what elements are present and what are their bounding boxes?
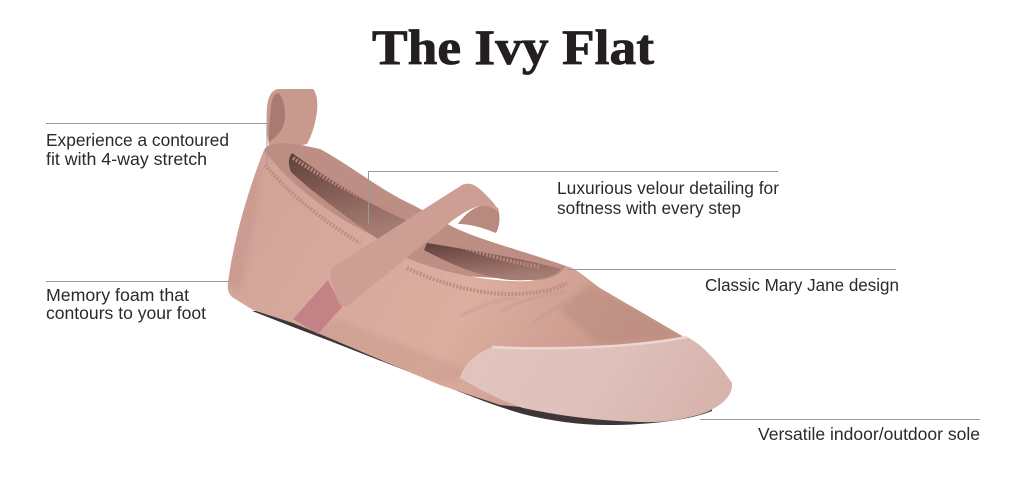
callout: contoured fit: Experience a contoured xyxy=(46,130,229,150)
callout: velour detailing: Luxurious velour detailing for xyxy=(557,178,779,198)
strap xyxy=(330,184,499,306)
gathers xyxy=(460,292,590,325)
callout: contoured fit: fit with 4-way stretch xyxy=(46,149,207,169)
toe velour xyxy=(460,337,732,422)
callout: memory foam: contours to your foot xyxy=(46,303,206,323)
heel tab xyxy=(267,89,317,152)
callout: velour detailing: softness with every step xyxy=(557,198,741,218)
callout: Mary Jane design: Classic Mary Jane design xyxy=(705,275,899,295)
far strap end xyxy=(458,205,499,233)
upper body xyxy=(228,150,684,415)
sole xyxy=(252,310,712,425)
callout: memory foam xyxy=(46,282,229,323)
shading inside the upper xyxy=(226,160,684,385)
stitched seams xyxy=(265,158,567,294)
shoe illustration xyxy=(226,89,732,425)
callout: contoured fit xyxy=(46,124,267,169)
inner lining rim xyxy=(262,143,566,282)
opening: back section xyxy=(289,153,410,242)
elastic panel xyxy=(293,280,342,334)
title: The Ivy Flat xyxy=(372,19,654,75)
callout: sole: Versatile indoor/outdoor sole xyxy=(758,424,980,444)
opening: front section xyxy=(424,243,561,280)
callout: velour detailing xyxy=(368,172,779,224)
callout: memory foam: Memory foam that xyxy=(46,285,189,305)
